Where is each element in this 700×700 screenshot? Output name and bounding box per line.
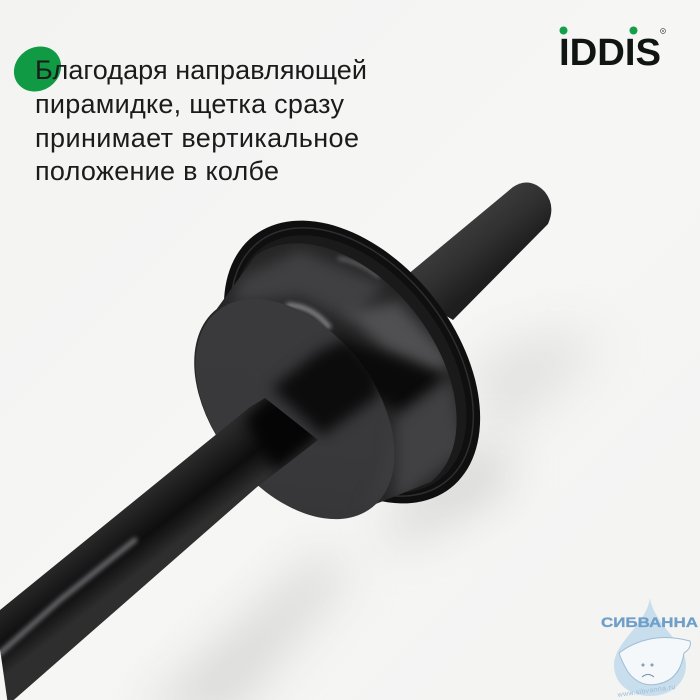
description text: пирамидке, щетка сразу: [35, 89, 344, 119]
upper rod: [395, 183, 551, 320]
logo: IDDIS: IDDIS: [559, 32, 661, 74]
tub face: [642, 664, 654, 677]
water drop: [614, 598, 686, 696]
brushed highlights: [232, 250, 465, 505]
flange: [172, 172, 532, 552]
cup front face: [196, 300, 394, 520]
description text: [35, 55, 367, 186]
face edge blending: [360, 420, 402, 515]
brush head disc: [194, 220, 480, 520]
reflection band on face: [272, 338, 380, 436]
bathtub: [619, 637, 690, 685]
soft shadows: [140, 334, 600, 700]
lower rod: [0, 396, 320, 700]
green accent blob: [5, 37, 70, 101]
cup body: [194, 244, 456, 504]
description text: принимает вертикальное: [35, 123, 359, 153]
sheen: [0, 540, 135, 655]
rod shaft: [0, 398, 318, 700]
socket shadow: [245, 396, 320, 472]
website: www.sibvanna.ru: [616, 684, 676, 699]
watermark: Sibvanna: [601, 598, 698, 699]
brand name: СИБВАННА: [601, 615, 698, 630]
description text: положение в колбе: [35, 156, 279, 186]
description text: Благодаря направляющей: [35, 55, 367, 85]
